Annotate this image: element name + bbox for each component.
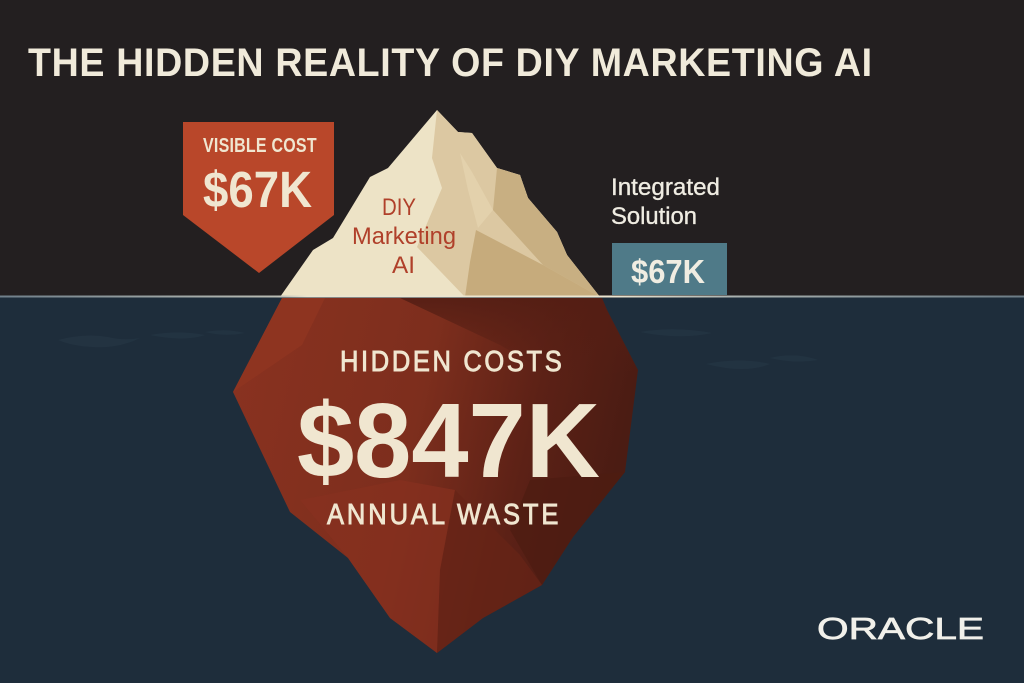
label line 1: DIY (382, 194, 416, 221)
annual waste caption: ANNUAL WASTE (327, 497, 558, 530)
callout: visible cost (183, 122, 334, 273)
sky background (0, 0, 1024, 297)
peak label: DIY Marketing AI (352, 194, 456, 279)
label line 2: Solution (611, 203, 697, 230)
callout value: $67K (203, 161, 312, 218)
callout label: VISIBLE COST (203, 134, 317, 156)
box (612, 243, 727, 295)
waterline (0, 296, 1024, 298)
label line 2: Marketing (352, 223, 456, 250)
peak right shadow facet (493, 168, 600, 297)
peak lower shadow facet (465, 230, 600, 297)
peak ridge highlight (460, 153, 493, 228)
visible iceberg peak (280, 110, 600, 297)
iceberg body (233, 298, 638, 653)
water ripples (58, 329, 818, 369)
water background (0, 297, 1024, 683)
integrated solution label (611, 174, 720, 230)
peak light face (280, 110, 600, 297)
peak shaded face (417, 110, 600, 297)
iceberg facets (233, 298, 638, 653)
underwater iceberg: hidden costs (233, 298, 638, 653)
logo: Oracle: ORACLE (817, 611, 984, 646)
integrated solution value box (612, 243, 727, 295)
hidden costs value: $847K (297, 382, 600, 500)
label line 3: AI (392, 252, 415, 279)
callout pentagon (183, 122, 334, 273)
hidden costs text block (297, 344, 600, 530)
label line 1: Integrated (611, 174, 720, 201)
value: $67K (631, 253, 705, 290)
hidden costs heading: HIDDEN COSTS (340, 344, 562, 377)
title: THE HIDDEN REALITY OF DIY MARKETING AI (28, 41, 872, 85)
